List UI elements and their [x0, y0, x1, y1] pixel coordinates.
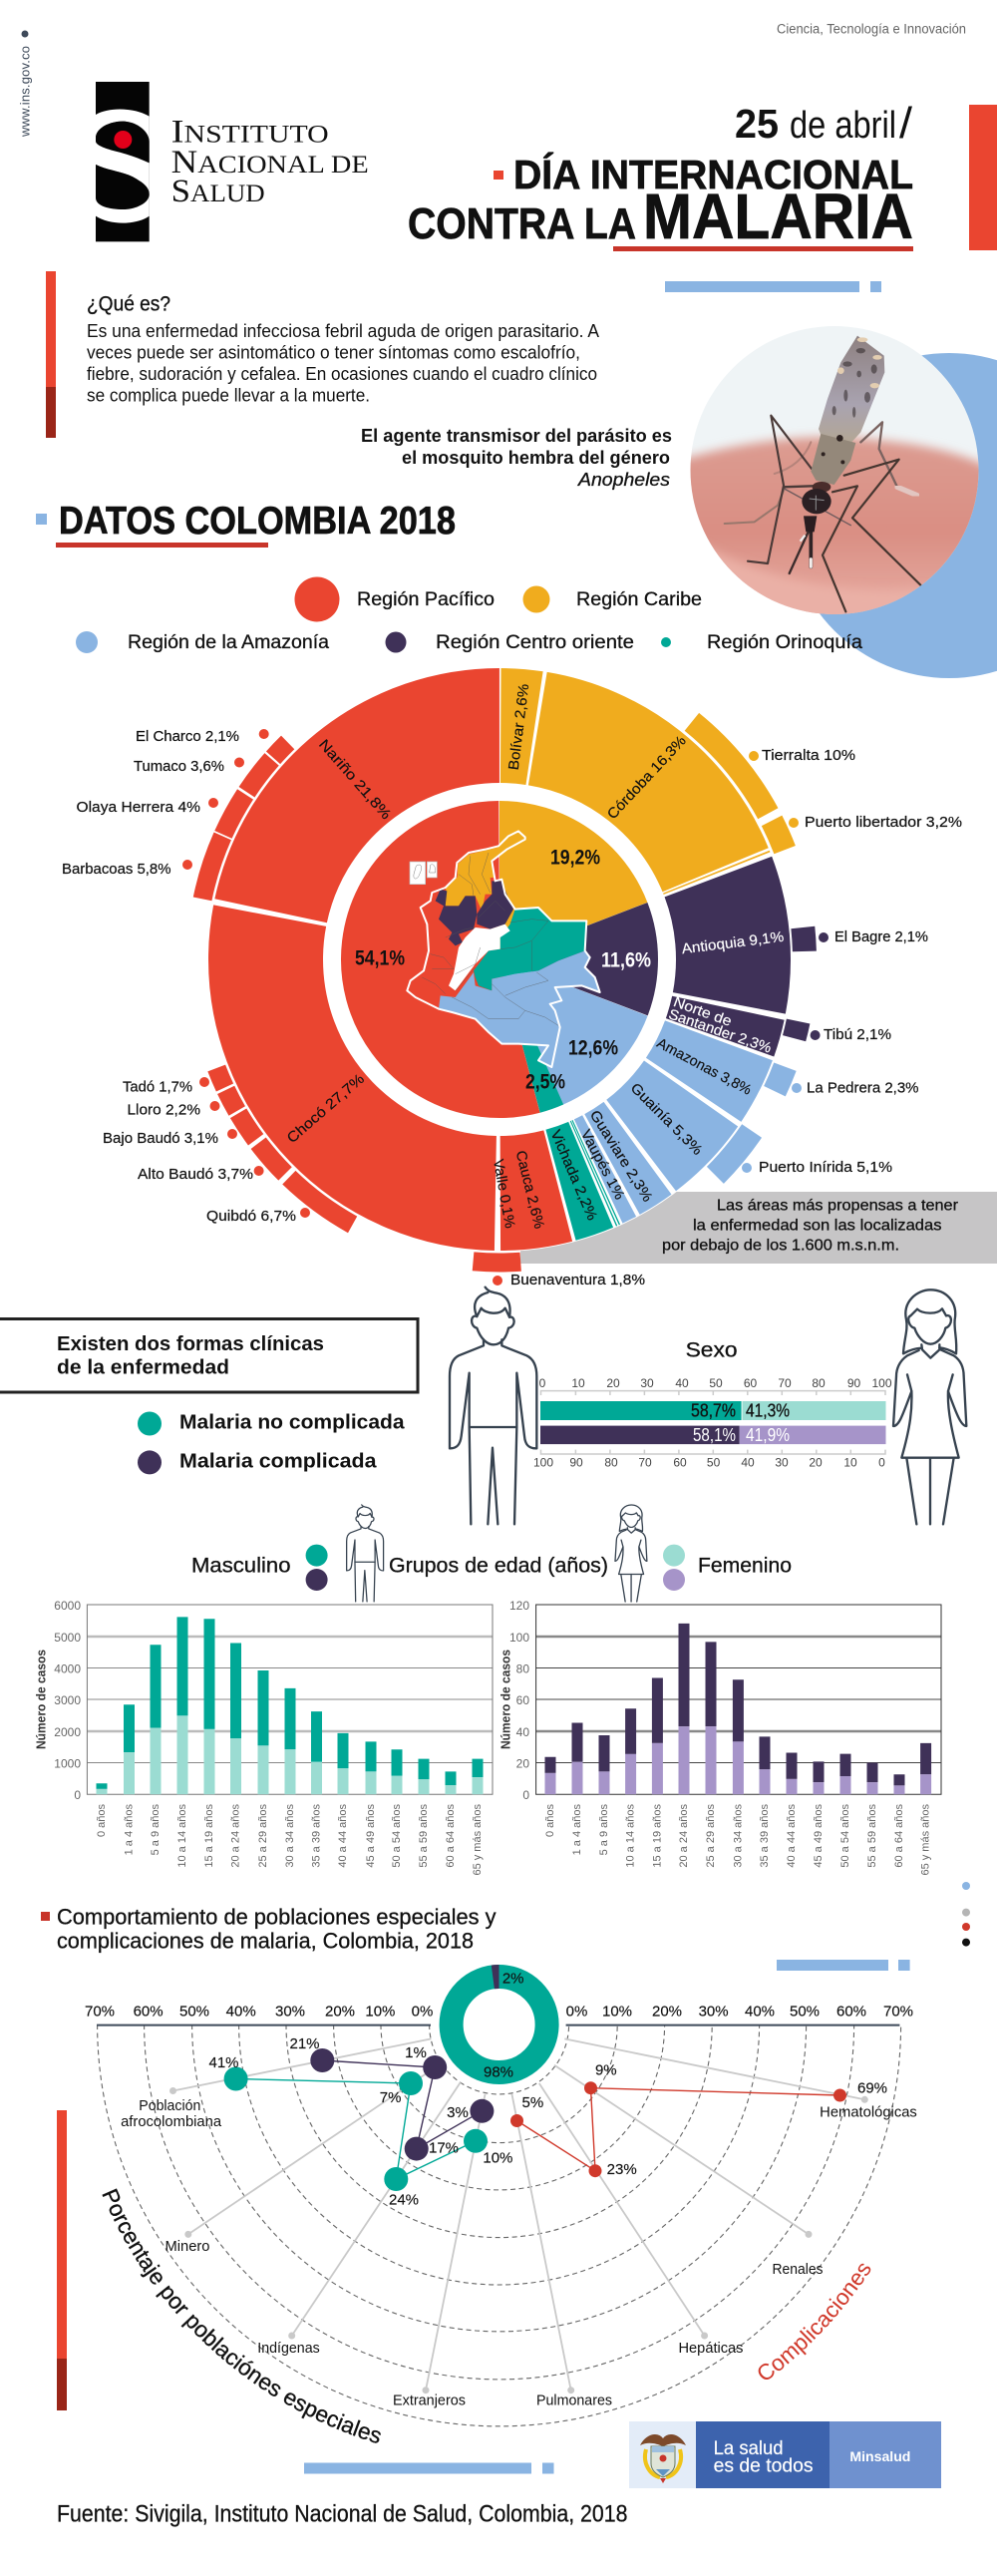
title: fecha y dia internacional contra la malaria: MALARIA	[643, 181, 913, 252]
inner pie percentages: 2,5%	[525, 1071, 565, 1093]
agent text: El agente transmisor del parásito es	[361, 426, 672, 446]
heading and legend: grupos de edad	[191, 1505, 792, 1602]
logo mark	[96, 82, 150, 241]
municipality labels: El Charco 2,1%	[136, 729, 239, 745]
x axis labels: 10 a 14 años	[176, 1804, 188, 1868]
panel: formas clinicas: de la enfermedad	[57, 1356, 229, 1378]
x axis labels: 60 a 64 años	[445, 1804, 457, 1868]
title: fecha y dia internacional contra la malaria: de abril	[790, 105, 896, 147]
x axis labels: 20 a 24 años	[678, 1804, 690, 1868]
ring labels: Valle 0,1%	[490, 1158, 517, 1230]
legend: regiones: Región Orinoquía	[707, 631, 862, 653]
spoke labels: Minero	[166, 2239, 209, 2255]
title: fecha y dia internacional contra la malaria	[408, 99, 913, 252]
source: Fuente: Sivigila, Instituto Nacional de Salud, Colombia, 2018	[57, 2501, 628, 2527]
donut: 98 / 2: 98%	[484, 2064, 513, 2080]
series: malaria complicada	[289, 2035, 494, 2161]
right red accent block	[969, 105, 997, 250]
inner pie	[395, 855, 604, 1064]
heading: poblaciones especiales: Comportamiento de poblaciones especiales y	[57, 1905, 497, 1929]
icon: male figure	[450, 1288, 536, 1524]
curved label: porcentaje: Porcentaje por poblaciónes especiales	[102, 2188, 381, 2443]
logo: minsalud: Minsalud	[849, 2448, 910, 2464]
ring labels: Córdoba 16,3%	[604, 733, 690, 823]
bottom axis: 80	[604, 1455, 618, 1469]
grey spokes	[173, 2038, 864, 2391]
y axis labels	[54, 1599, 81, 1802]
callout: areas propensas: por debajo de los 1.600 m.s.n.m.	[662, 1237, 899, 1255]
ring labels: Bolívar 2,6%	[506, 683, 532, 771]
bottom axis: 10	[843, 1455, 857, 1469]
bottom axis: 70	[638, 1455, 652, 1469]
inner pie percentages	[355, 846, 651, 1093]
municipality labels: Barbacoas 5,8%	[62, 862, 171, 878]
legend: regiones: Región Pacífico	[357, 588, 495, 610]
definition paragraph: veces puede ser asintomático o tener síntomas como escalofrío,	[87, 343, 580, 363]
logo: minsalud: es de todos	[714, 2455, 814, 2477]
title: fecha y dia internacional contra la malaria: /	[899, 99, 913, 148]
y axis labels: 1000	[54, 1757, 81, 1771]
title: fecha y dia internacional contra la malaria: CONTRA LA	[408, 199, 636, 248]
x axis labels: 65 y más años	[472, 1804, 484, 1876]
x axis labels	[544, 1804, 932, 1876]
axis labels: 60%	[836, 2003, 866, 2020]
axis labels: 30%	[275, 2003, 305, 2020]
top axis: 70	[778, 1376, 792, 1390]
series: malaria no complicada	[208, 2054, 512, 2208]
spoke labels: Renales	[772, 2262, 824, 2278]
x axis labels	[96, 1804, 484, 1876]
map of Colombia	[407, 831, 600, 1067]
municipality labels: El Bagre 2,1%	[834, 929, 928, 945]
legend: tipo de malaria: Malaria no complicada	[179, 1410, 405, 1434]
heading and legend: grupos de edad: Grupos de edad (años)	[389, 1554, 608, 1578]
ring labels: Chocó 27,7%	[284, 1071, 368, 1147]
legend: regiones: Región de la Amazonía	[128, 631, 329, 653]
municipality labels: Tumaco 3,6%	[134, 759, 224, 775]
bottom axis: 100	[533, 1455, 553, 1469]
y axis labels: 20	[516, 1757, 529, 1771]
bars: 58,1%	[693, 1425, 736, 1445]
ring labels: Santander 2,3%	[666, 1006, 774, 1057]
heading and legend: grupos de edad: Femenino	[698, 1554, 792, 1578]
blue circle behind photo	[787, 353, 997, 678]
top axis: 40	[675, 1376, 689, 1390]
series: malaria complicada: 17%	[429, 2140, 459, 2156]
photo: anopheles mosquito	[690, 326, 979, 614]
y axis labels: 5000	[54, 1631, 81, 1645]
x axis labels: 5 a 9 años	[150, 1804, 162, 1855]
top axis: 10	[571, 1376, 585, 1390]
heading: poblaciones especiales: complicaciones de malaria, Colombia, 2018	[57, 1929, 474, 1953]
blue accent bar top	[665, 281, 881, 292]
y axis labels: 0	[522, 1788, 529, 1802]
bottom axis	[533, 1450, 885, 1469]
ring labels: Amazonas 3,8%	[654, 1035, 754, 1099]
definition paragraph: se complica puede llevar a la muerte.	[87, 385, 370, 405]
x axis labels: 15 a 19 años	[651, 1804, 663, 1868]
legend: regiones: Región Centro oriente	[436, 631, 634, 653]
donut chart: regiones y departamentos	[62, 530, 962, 1389]
x axis labels: 10 a 14 años	[625, 1804, 637, 1868]
municipality labels: Puerto Inírida 5,1%	[759, 1160, 892, 1176]
y axis title: Número de casos	[498, 1650, 512, 1749]
spoke labels	[121, 2098, 917, 2409]
ring labels: Cauca 2,6%	[512, 1149, 546, 1231]
callout: areas propensas: la enfermedad son las localizadas	[693, 1217, 941, 1235]
logo wordmark: SALUD	[171, 174, 265, 209]
series: complicaciones: 5%	[522, 2094, 543, 2111]
series: complicaciones: 9%	[595, 2061, 617, 2078]
logo: minsalud	[629, 2421, 941, 2488]
callout: areas propensas: Las áreas más propensas a tener	[717, 1197, 959, 1215]
bottom axis: 40	[741, 1455, 755, 1469]
municipality labels: Tibú 2,1%	[824, 1027, 891, 1043]
series: complicaciones: 23%	[607, 2161, 637, 2178]
x axis labels: 60 a 64 años	[893, 1804, 905, 1868]
axis labels: 10%	[365, 2003, 395, 2020]
radar chart: poblaciones especiales y complicaciones	[85, 1965, 917, 2443]
axis labels: 20%	[652, 2003, 682, 2020]
middle ring: departamentos	[172, 632, 827, 1287]
y axis labels: 4000	[54, 1661, 81, 1675]
icon: small female	[615, 1505, 647, 1602]
municipality labels: La Pedrera 2,3%	[807, 1080, 919, 1096]
mosquito	[725, 336, 920, 611]
agent text	[361, 426, 672, 490]
donut: 98 / 2	[446, 1971, 552, 2080]
x axis labels: 25 a 29 años	[705, 1804, 717, 1868]
panel: que es	[46, 271, 599, 438]
blue accent bar bottom	[304, 2463, 554, 2473]
municipality labels: Bajo Baudó 3,1%	[103, 1131, 218, 1147]
y axis labels: 2000	[54, 1725, 81, 1739]
axis labels: 60%	[134, 2003, 164, 2020]
y axis labels: 80	[516, 1661, 529, 1675]
axis labels: 40%	[226, 2003, 256, 2020]
municipality labels: Quibdó 6,7%	[206, 1209, 296, 1225]
top axis: 0	[539, 1376, 546, 1390]
legend: tipo de malaria: Malaria complicada	[179, 1450, 377, 1472]
series: malaria no complicada: 41%	[208, 2054, 239, 2071]
y axis labels: 3000	[54, 1693, 81, 1707]
x axis labels: 30 a 34 años	[732, 1804, 744, 1868]
x axis labels: 0 años	[544, 1804, 556, 1837]
ring labels	[284, 683, 785, 1231]
inner pie percentages: 11,6%	[601, 949, 651, 971]
axis labels: 70%	[883, 2003, 913, 2020]
vertical website label: www.ins.gov.co	[18, 46, 32, 138]
spoke labels: Hepáticas	[678, 2341, 744, 2357]
x axis labels: 40 a 44 años	[337, 1804, 349, 1868]
municipality labels	[62, 729, 962, 1288]
y axis labels: 6000	[54, 1599, 81, 1613]
chart title: Sexo	[686, 1338, 738, 1362]
bottom axis: 50	[707, 1455, 721, 1469]
heading: poblaciones especiales	[41, 1905, 497, 1953]
x axis labels: 40 a 44 años	[786, 1804, 798, 1868]
top axis: 20	[606, 1376, 620, 1390]
axis labels: 20%	[325, 2003, 355, 2020]
frame and grid	[87, 1605, 493, 1794]
bottom axis: 30	[775, 1455, 789, 1469]
x axis labels: 55 a 59 años	[866, 1804, 878, 1868]
axis lines	[97, 2024, 899, 2026]
x axis labels: 25 a 29 años	[257, 1804, 269, 1868]
top axis: 80	[812, 1376, 826, 1390]
axis labels: 0%	[412, 2003, 433, 2020]
ring labels: Norte de	[671, 994, 734, 1030]
icon: female figure	[893, 1289, 966, 1524]
series: malaria no complicada: 24%	[389, 2191, 419, 2208]
bottom axis: 90	[569, 1455, 583, 1469]
spoke labels: Extranjeros	[393, 2393, 466, 2409]
series: complicaciones	[510, 2061, 887, 2178]
x axis labels: 65 y más años	[920, 1804, 932, 1876]
series: malaria complicada: 3%	[447, 2104, 469, 2121]
axis labels: 50%	[179, 2003, 209, 2020]
ring labels: Guaviare 2,3%	[586, 1108, 655, 1205]
municipality labels: Lloro 2,2%	[128, 1103, 200, 1119]
x axis labels: 1 a 4 años	[571, 1804, 583, 1855]
inner pie percentages: 12,6%	[568, 1037, 618, 1059]
chart: femenino por edad	[498, 1599, 941, 1876]
logo wordmark	[171, 115, 369, 209]
outer ring: municipios	[70, 530, 929, 1389]
ring labels: Nariño 21,8%	[315, 737, 394, 823]
x axis labels: 45 a 49 años	[813, 1804, 825, 1868]
icon: small male	[347, 1505, 384, 1602]
logo: Instituto Nacional de Salud	[96, 82, 369, 241]
top axis: 90	[847, 1376, 860, 1390]
top axis	[539, 1376, 892, 1395]
axis labels: 50%	[790, 2003, 820, 2020]
frame and grid	[536, 1605, 941, 1794]
y axis labels: 0	[74, 1788, 81, 1802]
legend: regiones	[76, 576, 862, 653]
ring labels: Vichada 2,2%	[546, 1128, 600, 1223]
y axis labels: 100	[509, 1631, 529, 1645]
series: malaria no complicada: 7%	[380, 2089, 401, 2106]
dark bars	[544, 1624, 931, 1785]
spoke labels: afrocolombiana	[121, 2114, 222, 2130]
panel: formas clinicas: Existen dos formas clínicas	[57, 1332, 324, 1355]
purple bars	[544, 1726, 931, 1794]
y axis labels: 40	[516, 1725, 529, 1739]
definition paragraph: Es una enfermedad infecciosa febril aguda de origen parasitario. A	[87, 321, 599, 341]
blue accent bar middle	[777, 1960, 910, 1971]
header tag: ciencia, tecnologia e innovacion: Ciencia, Tecnología e Innovación	[777, 22, 966, 36]
complicated-type bars	[96, 1617, 483, 1789]
chart: sexo	[533, 1338, 892, 1469]
logo wordmark: NACIONAL DE	[171, 145, 369, 181]
top axis: 50	[709, 1376, 723, 1390]
legend: tipo de malaria	[138, 1410, 405, 1474]
series: complicaciones: 69%	[857, 2080, 887, 2096]
callout: areas propensas	[207, 667, 997, 1264]
logo wordmark: INSTITUTO	[171, 115, 329, 151]
axis labels: 30%	[699, 2003, 729, 2020]
x axis labels: 50 a 54 años	[839, 1804, 851, 1868]
bars: 58,7%	[691, 1400, 736, 1420]
x axis labels: 0 años	[96, 1804, 108, 1837]
ring labels: Guainía 5,3%	[627, 1080, 705, 1159]
x axis labels: 20 a 24 años	[230, 1804, 242, 1868]
top axis: 100	[871, 1376, 892, 1390]
series: malaria complicada: 1%	[405, 2044, 427, 2061]
top axis: 30	[640, 1376, 654, 1390]
x axis labels: 30 a 34 años	[284, 1804, 296, 1868]
red side bar	[46, 271, 56, 438]
y axis labels	[509, 1599, 529, 1802]
bottom axis: 20	[809, 1455, 823, 1469]
panel: formas clinicas	[0, 1318, 418, 1392]
spoke labels: Población	[139, 2098, 200, 2114]
municipality labels: Puerto libertador 3,2%	[805, 815, 962, 831]
x axis labels: 55 a 59 años	[418, 1804, 430, 1868]
axis labels: 40%	[745, 2003, 775, 2020]
heading: datos colombia 2018: DATOS COLOMBIA 2018	[59, 500, 456, 543]
ring labels: Vaupés 1%	[577, 1127, 627, 1203]
municipality labels: Buenaventura 1,8%	[510, 1273, 645, 1288]
spoke labels: Indígenas	[257, 2341, 320, 2357]
y axis labels: 120	[509, 1599, 529, 1613]
icon: coat of arms	[640, 2434, 686, 2483]
spoke labels: Pulmonares	[536, 2393, 612, 2409]
agent text: Anopheles	[577, 470, 670, 490]
chart: masculino por edad	[34, 1599, 493, 1876]
municipality labels: Alto Baudó 3,7%	[138, 1167, 253, 1183]
definition paragraph	[87, 321, 599, 405]
x axis labels: 35 a 39 años	[759, 1804, 771, 1868]
series: malaria complicada: 21%	[289, 2035, 320, 2052]
spoke labels: Hematológicas	[820, 2105, 917, 2121]
heading and legend: grupos de edad: Masculino	[191, 1554, 291, 1578]
axis labels: 70%	[85, 2003, 115, 2020]
axis labels	[85, 2003, 913, 2020]
decorative legend dots right	[962, 1882, 970, 1947]
x axis labels: 50 a 54 años	[391, 1804, 403, 1868]
x axis labels: 45 a 49 años	[365, 1804, 377, 1868]
municipality labels: Olaya Herrera 4%	[76, 800, 200, 816]
inner pie percentages: 54,1%	[355, 947, 405, 969]
bottom axis: 0	[878, 1455, 885, 1469]
y axis title: Número de casos	[34, 1650, 48, 1749]
light bars	[96, 1715, 483, 1794]
red side bar bottom	[57, 2110, 67, 2410]
series: malaria no complicada: 10%	[483, 2149, 512, 2166]
municipality labels: Tierralta 10%	[762, 748, 855, 764]
axis labels: 0%	[566, 2003, 587, 2020]
y axis labels: 60	[516, 1693, 529, 1707]
inner pie percentages: 19,2%	[550, 846, 600, 870]
x axis labels: 15 a 19 años	[203, 1804, 215, 1868]
municipality labels: Tadó 1,7%	[123, 1079, 192, 1095]
donut: 98 / 2: 2%	[502, 1971, 524, 1987]
x axis labels: 1 a 4 años	[124, 1804, 136, 1855]
logo: minsalud: La salud	[714, 2438, 784, 2459]
bars	[540, 1400, 885, 1445]
title: fecha y dia internacional contra la malaria: DÍA INTERNACIONAL	[513, 152, 913, 197]
bars: 41,3%	[746, 1400, 790, 1420]
agent text: el mosquito hembra del género	[402, 448, 670, 468]
axis labels: 10%	[602, 2003, 632, 2020]
legend: regiones: Región Caribe	[576, 588, 702, 610]
x axis labels: 5 a 9 años	[598, 1804, 610, 1855]
definition paragraph: fiebre, sudoración y cefalea. En ocasiones cuando el cuadro clínico	[87, 364, 597, 384]
bottom axis: 60	[673, 1455, 687, 1469]
curved label: complicaciones: Complicaciones	[758, 2264, 871, 2380]
title: fecha y dia internacional contra la malaria: 25	[735, 101, 779, 147]
ring labels: Antioquia 9,1%	[681, 929, 785, 957]
x axis labels: 35 a 39 años	[311, 1804, 323, 1868]
top axis: 60	[744, 1376, 757, 1390]
bars: 41,9%	[746, 1425, 790, 1445]
heading que es: ¿Qué es?	[87, 293, 170, 315]
dashed percentage arcs	[98, 2024, 901, 2426]
